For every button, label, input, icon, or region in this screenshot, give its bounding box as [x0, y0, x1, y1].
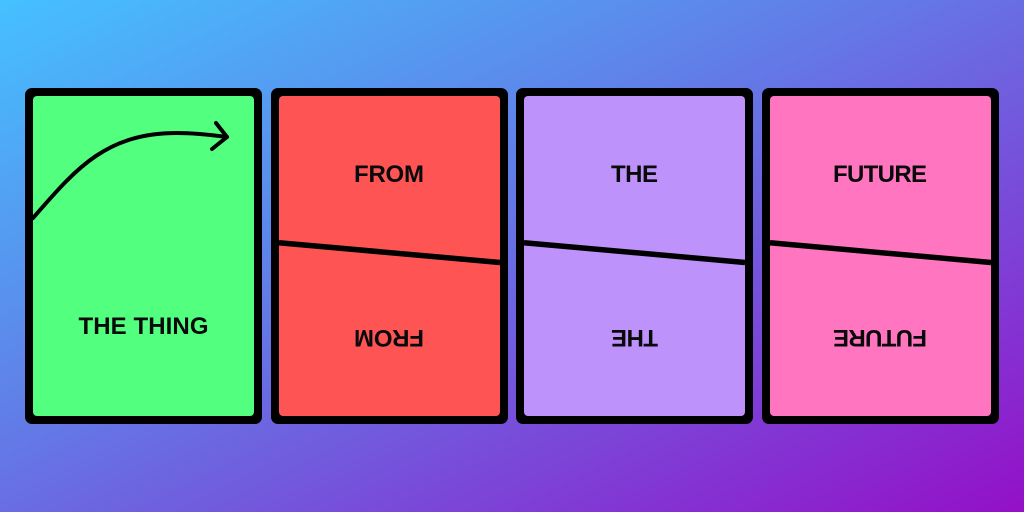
divider line: [279, 243, 500, 262]
panel: card THE: [516, 88, 753, 424]
label: flipped FROM: FROM: [354, 324, 424, 351]
label: THE: THE: [611, 161, 658, 188]
panel: card FUTURE: [762, 88, 999, 424]
divider line: [770, 243, 991, 262]
label: flipped FUTURE: FUTURE: [833, 324, 927, 351]
label: flipped THE: THE: [611, 324, 658, 351]
panel: card THE THING: [25, 88, 262, 424]
divider line: [524, 243, 745, 262]
label: FROM: FROM: [354, 161, 424, 188]
label: FUTURE: FUTURE: [833, 161, 927, 188]
label: THE THING: THE THING: [78, 313, 208, 340]
icon: curved arrow: [33, 123, 227, 218]
panel: card FROM: [271, 88, 508, 424]
